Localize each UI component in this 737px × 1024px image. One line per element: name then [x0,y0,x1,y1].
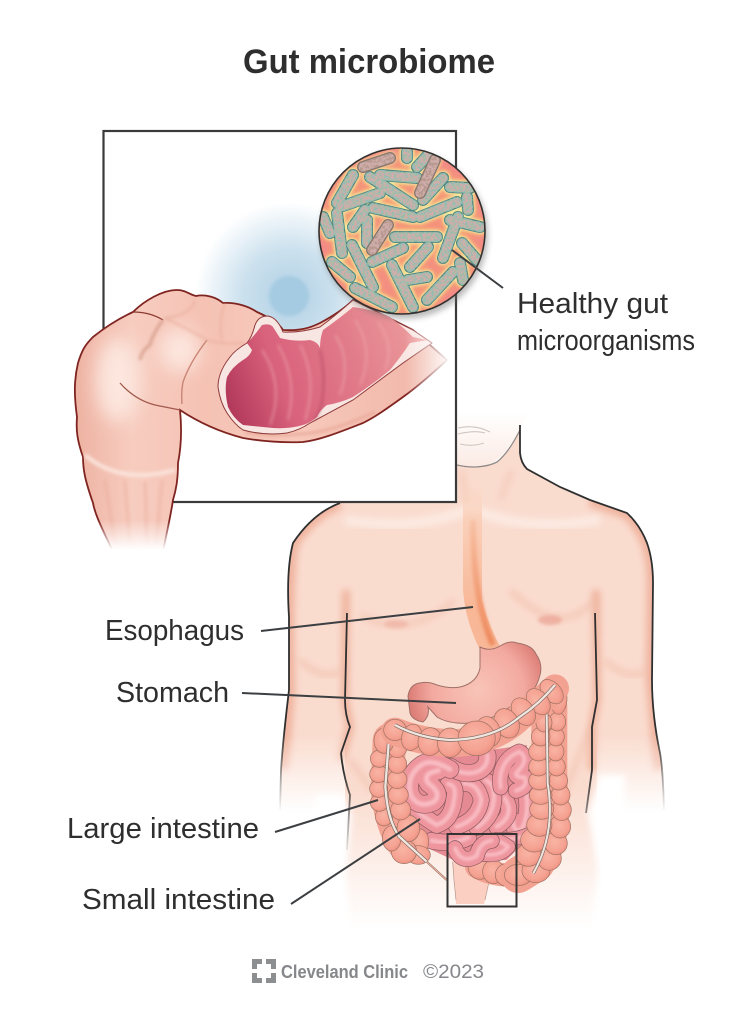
footer: copyright: ©2023 [423,962,484,983]
stomach [408,642,541,723]
transverse colon [384,675,568,757]
skin edge fades [270,735,672,940]
body outline [280,425,664,850]
label: healthy gut microorganisms: microorganisms [517,325,695,357]
face and chin [440,405,530,467]
leader: stomach [242,693,456,703]
inset marker box [448,834,516,906]
body illustration: torso with digestive system [279,425,665,908]
magnified bacteria circle [319,148,488,319]
small intestine [405,745,537,862]
icon: Cleveland Clinic logo [252,959,276,983]
footer: Cleveland Clinic brand: Cleveland Clinic [281,962,408,982]
descending colon [504,682,571,886]
blue glow behind colon [195,202,383,390]
sigmoid colon [468,854,520,886]
large intestine and small intestine [370,675,571,904]
colon cross-section [75,290,451,556]
inset frame [104,131,456,502]
colon outer wall [75,290,447,552]
label: large intestine: Large intestine [67,813,259,845]
colon lumen folds [262,320,389,425]
colon end fades [405,322,451,398]
colon lumen [226,307,428,428]
label: esophagus: Esophagus [105,615,244,647]
ascending colon [370,728,447,880]
leader: healthy gut microorganisms [452,250,503,288]
leader: esophagus [261,607,473,631]
leader: large intestine [275,800,378,832]
skin shading [282,470,660,810]
label: small intestine: Small intestine [82,884,275,916]
colon cut rim [218,300,432,434]
label: healthy gut microorganisms [517,288,695,357]
title: Gut microbiome [243,43,495,81]
leader: small intestine [291,819,420,904]
label: healthy gut microorganisms: Healthy gut [517,288,668,320]
colon folds and highlights [85,300,375,548]
rectum [453,862,489,904]
body skin silhouette [280,428,664,932]
label: stomach: Stomach [116,677,229,709]
esophagus [463,480,502,650]
